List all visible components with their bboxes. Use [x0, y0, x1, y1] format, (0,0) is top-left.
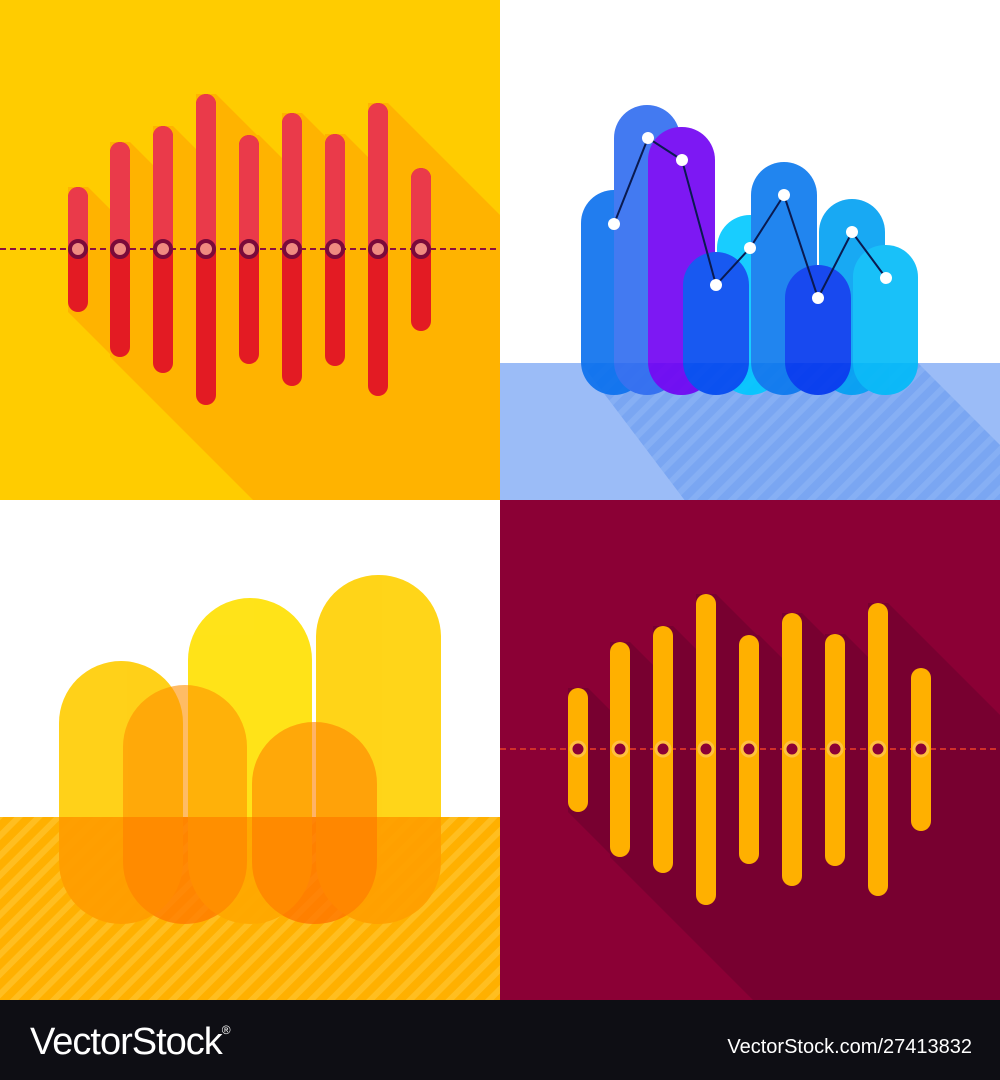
- panel: top-left red equalizer: [0, 0, 500, 500]
- long shadow: [568, 594, 1000, 1000]
- footer url: VectorStock.com/27413832: [727, 1036, 972, 1058]
- knobs: [70, 241, 429, 257]
- line with points: [608, 132, 892, 304]
- orange pills: [123, 685, 377, 924]
- panel: bottom-left yellow pill chart: [0, 575, 500, 1000]
- panel: top-right blue line chart: [500, 105, 1000, 500]
- footer bar: [0, 1000, 1000, 1080]
- floor tint over pills: [59, 817, 441, 924]
- knobs: [571, 742, 928, 756]
- panel: bottom-right orange equalizer: [500, 500, 1000, 1000]
- footer logo: VectorStock: [30, 1021, 222, 1063]
- footer logo: ®: [222, 1023, 231, 1037]
- long shadow: [68, 94, 500, 500]
- dashed baseline: [500, 748, 1000, 750]
- bars: [68, 94, 431, 405]
- floor shadow: [604, 363, 1000, 500]
- pill bars: [581, 105, 918, 395]
- bars: [568, 594, 931, 905]
- dashed baseline: [0, 248, 500, 250]
- yellow pills: [59, 575, 441, 924]
